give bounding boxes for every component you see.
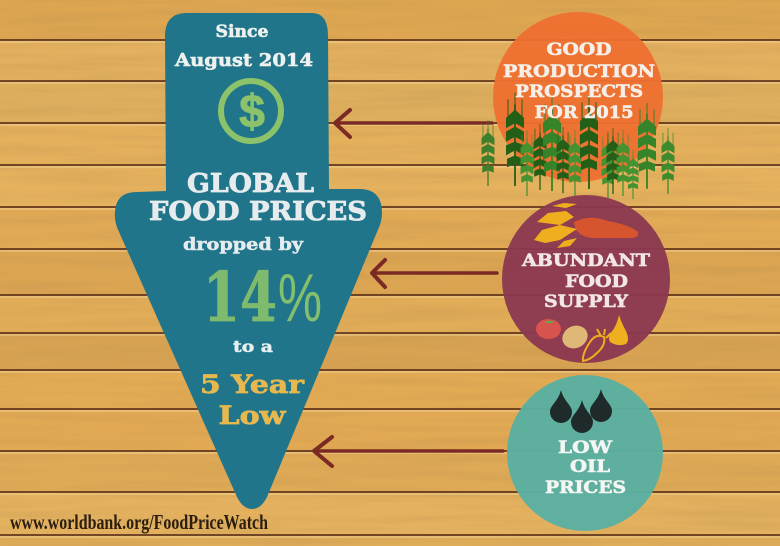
text: to a: to a	[233, 337, 273, 356]
stat: 14 percent: 14	[203, 258, 277, 338]
text: good production prospects	[503, 40, 655, 123]
circle: good production prospects	[482, 12, 674, 199]
text: good production prospects: FOR 2015	[534, 103, 634, 123]
circle: abundant food supply	[502, 195, 670, 363]
text: dropped by: dropped by	[183, 235, 304, 255]
text: abundant food supply: ABUNDANT	[521, 251, 650, 271]
icon: oil drops	[550, 389, 612, 433]
text: abundant food supply: SUPPLY	[544, 292, 629, 312]
icon: dollar coin	[221, 81, 281, 141]
icon: wheat field	[482, 92, 674, 199]
text: good production prospects: GOOD	[546, 40, 612, 60]
text: 5 year low: 5 Year	[200, 370, 305, 399]
text: low oil prices: OIL	[570, 457, 610, 477]
icon: wheat and bread	[534, 203, 638, 248]
stat: 14 percent: %	[278, 260, 322, 336]
text: low oil prices: LOW	[558, 438, 613, 458]
text: since date: August 2014	[174, 50, 313, 71]
text: abundant food supply	[521, 251, 650, 312]
text: 5 year low	[200, 370, 305, 430]
heading: global food prices	[149, 169, 367, 227]
text: low oil prices: PRICES	[545, 478, 626, 498]
text: abundant food supply: FOOD	[565, 272, 628, 292]
arrow: oil to panel	[314, 437, 503, 466]
heading: global food prices: FOOD PRICES	[149, 197, 367, 227]
text: low oil prices	[545, 438, 626, 498]
arrow: production to panel	[335, 110, 492, 137]
heading: global food prices: GLOBAL	[187, 169, 314, 199]
icon: tomato, potato, carrot, pear	[536, 315, 628, 361]
icon: dollar coin: $	[239, 85, 265, 137]
text: 5 year low: Low	[218, 401, 287, 430]
text: good production prospects: PRODUCTION	[503, 62, 655, 82]
source url: www.worldbank.org/FoodPriceWatch	[10, 510, 268, 534]
arrow: food supply to panel	[372, 260, 497, 287]
big teal down arrow panel	[115, 13, 382, 509]
text: good production prospects: PROSPECTS	[515, 82, 643, 102]
circle: low oil prices	[507, 375, 663, 531]
text: since date	[174, 22, 313, 71]
text: since date: Since	[216, 22, 269, 42]
